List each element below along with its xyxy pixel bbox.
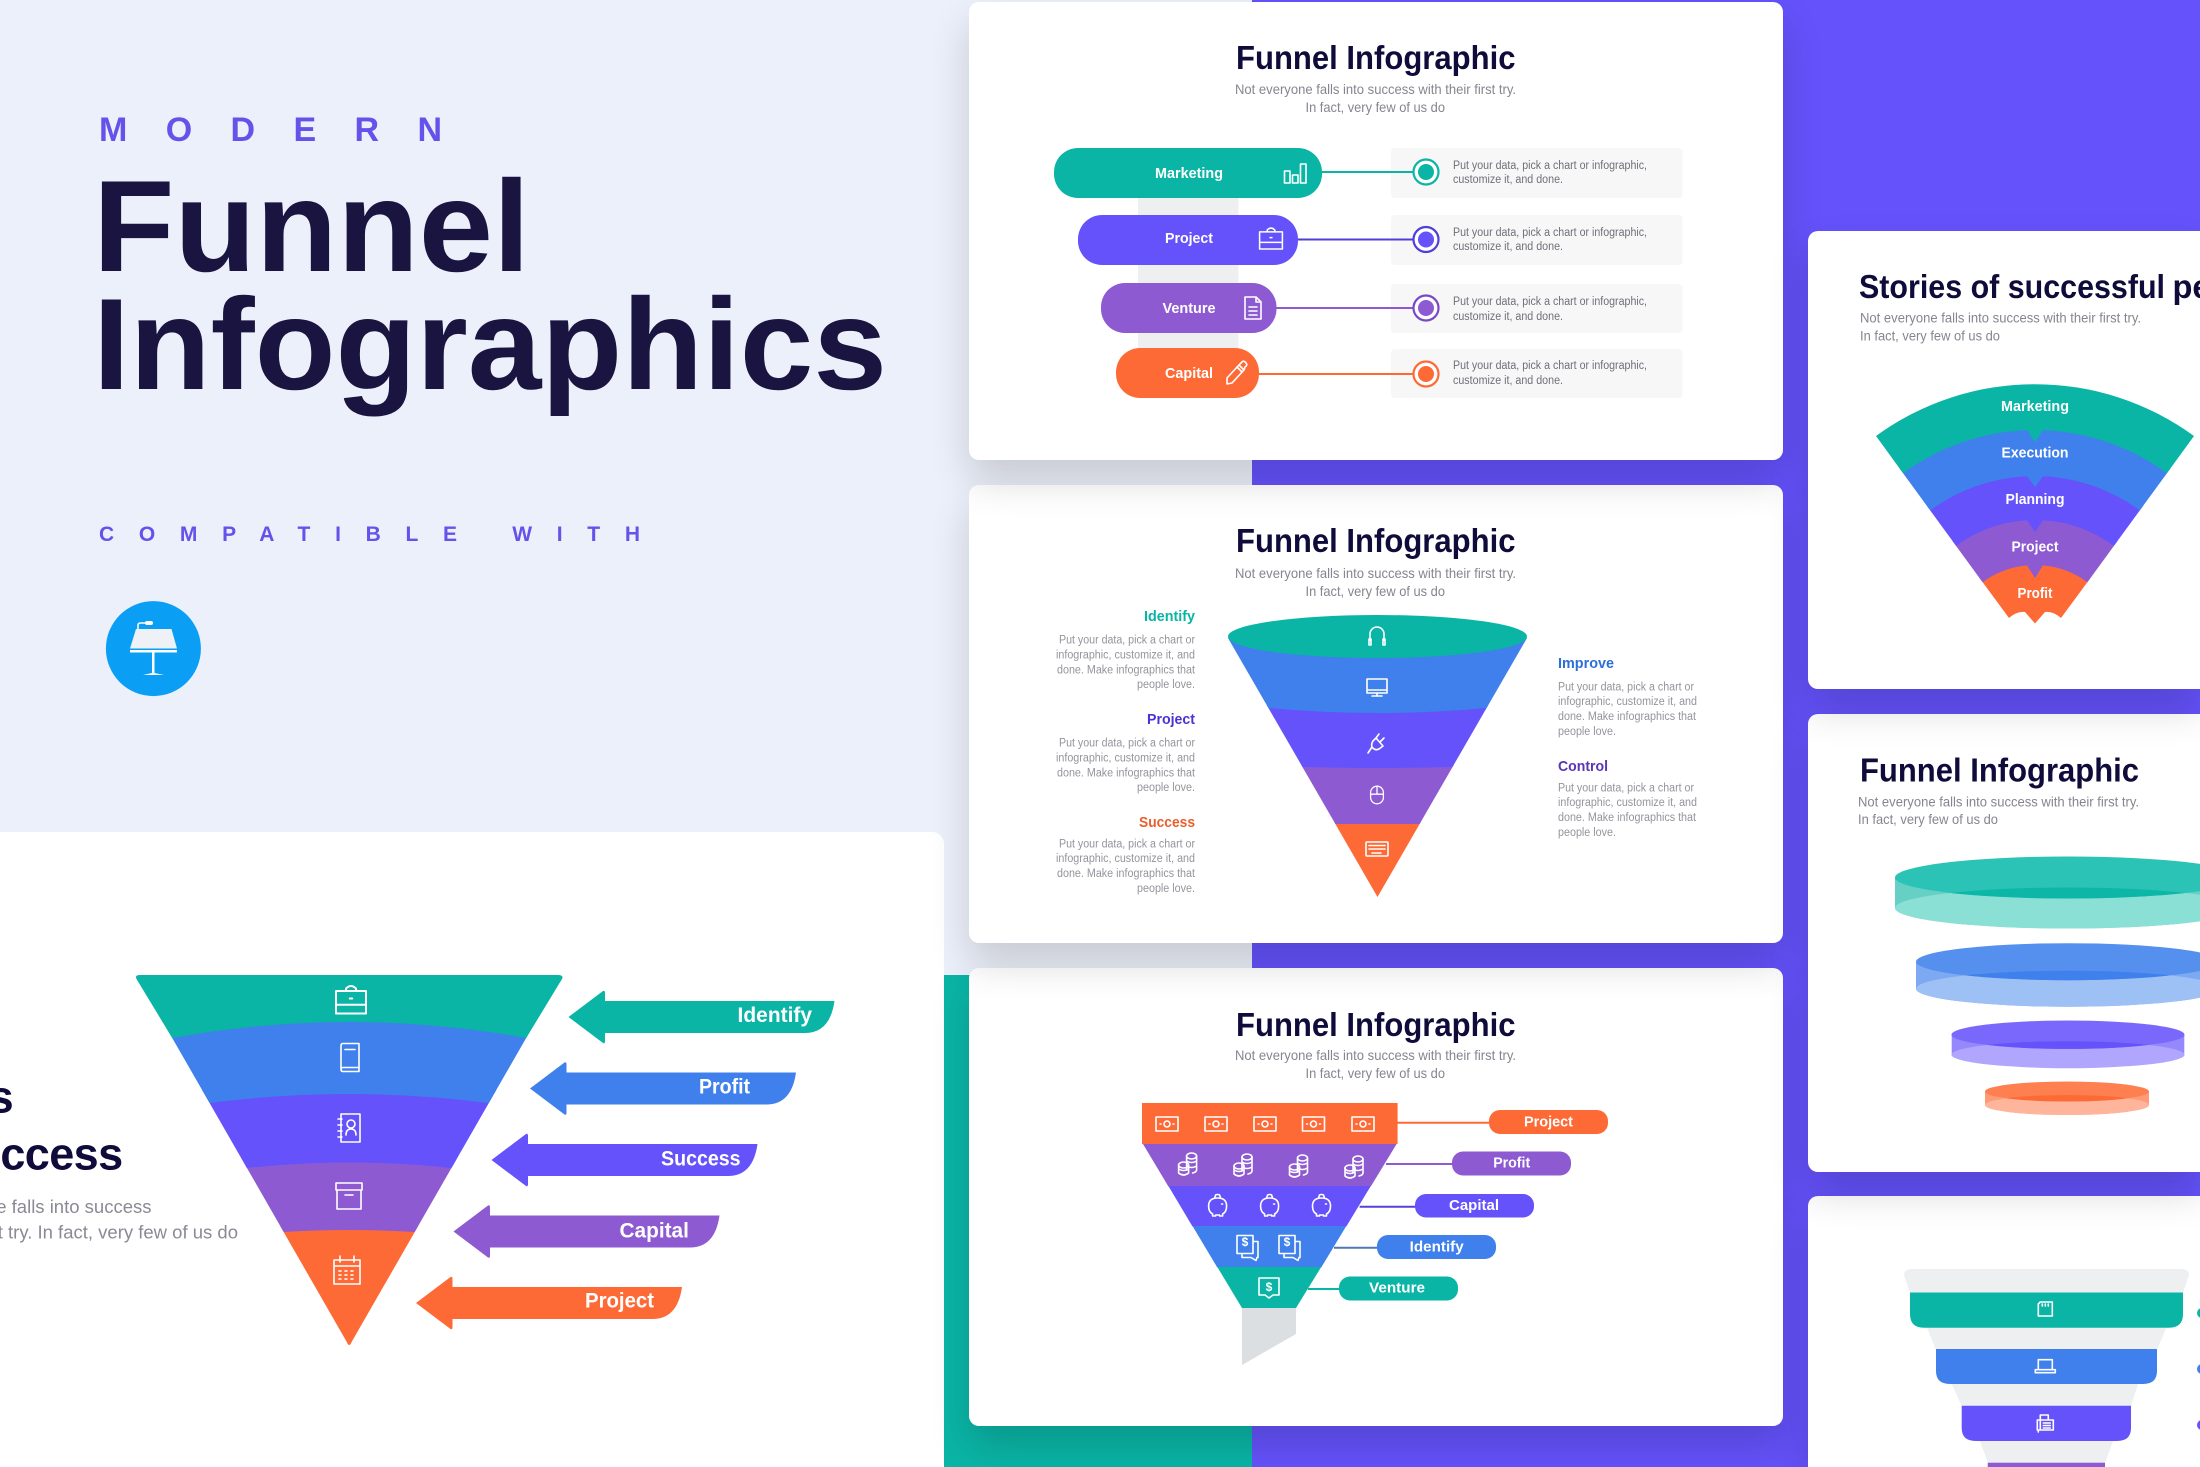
text block: Identify — [1056, 608, 1196, 691]
text block: Improve: Improve — [1558, 655, 1614, 672]
label: Capital — [1360, 1194, 1534, 1218]
icon: monitor — [1367, 679, 1387, 696]
subheading: In fact, very few of us do — [1306, 583, 1445, 599]
icon: keynote — [106, 601, 201, 696]
body copy: customize it, and done. — [1453, 241, 1563, 253]
text block: Improve: people love. — [1558, 726, 1616, 738]
arrow: Profit: Profit — [699, 1076, 750, 1098]
text block: Success — [1056, 814, 1196, 895]
bar: blue — [1936, 1349, 2157, 1384]
text block: Identify: people love. — [1137, 679, 1195, 691]
fan labels: Planning — [2006, 491, 2064, 508]
eyebrow: MODERN: MODERN — [99, 111, 442, 149]
label: Capital: Capital — [1449, 1198, 1499, 1214]
text block: Success: Success — [1139, 814, 1195, 831]
body copy: customize it, and done. — [1453, 174, 1563, 186]
panel: pill funnel card — [969, 2, 1783, 460]
subheading fragment — [0, 1196, 238, 1242]
label: Profit — [1386, 1152, 1571, 1176]
main title: Infographics — [93, 271, 887, 417]
text block: Improve — [1558, 655, 1697, 738]
heading: Funnel Infographic — [1236, 1006, 1516, 1043]
icon: headphones — [1369, 627, 1385, 645]
label: Venture: Venture — [1369, 1280, 1425, 1296]
label: Venture — [1308, 1276, 1458, 1300]
heading: Funnel Infographic — [1236, 39, 1516, 76]
icon: laptop — [2035, 1360, 2055, 1373]
icon: contact book — [338, 1114, 360, 1142]
text block: Success: Put your data, pick a chart or — [1059, 838, 1195, 850]
icon: plug — [1368, 734, 1384, 753]
body copy: customize it, and done. — [1453, 375, 1563, 387]
main title — [93, 153, 887, 417]
icons: money chat: $ — [1242, 1235, 1249, 1249]
body copy: Put your data, pick a chart or infographic, — [1453, 360, 1647, 372]
cone funnel chart — [1228, 615, 1527, 897]
heading fragment — [0, 1072, 122, 1180]
text block: Control: done. Make infographics that — [1558, 812, 1697, 824]
text block: Improve: infographic, customize it, and — [1558, 696, 1697, 708]
arrow: Project: Project — [585, 1290, 654, 1312]
body copy: Put your data, pick a chart or infographic, — [1453, 296, 1647, 308]
panel: stacked bars funnel card — [1808, 1196, 2200, 1467]
subheading — [1235, 1047, 1516, 1081]
funnel spout — [1242, 1308, 1296, 1365]
icons: coins — [1179, 1153, 1363, 1178]
subheading: Not everyone falls into success with their first try. — [1235, 81, 1516, 97]
funnel backing — [1904, 1269, 2189, 1463]
icons: banknotes — [1156, 1117, 1374, 1131]
fan funnel chart — [1876, 384, 2194, 624]
subheading: Not everyone falls into success with their first try. — [1235, 1047, 1516, 1063]
subheading: Not everyone falls into success with their first try. — [1858, 794, 2139, 810]
panel: fan funnel card — [1808, 231, 2200, 689]
connector: Capital — [1259, 362, 1438, 386]
text block: Control: Put your data, pick a chart or — [1558, 782, 1694, 794]
icons: money chat: $ — [1284, 1235, 1291, 1249]
icon: mouse — [1371, 786, 1383, 804]
icon: archive box — [336, 1183, 362, 1209]
text block: Project: Project — [1147, 711, 1195, 728]
text block: Project — [1056, 711, 1196, 794]
icon: dollar tag: $ — [1266, 1280, 1273, 1294]
funnel spine — [1138, 190, 1238, 355]
text block: Success: infographic, customize it, and — [1056, 853, 1195, 865]
fan labels: Marketing — [2001, 398, 2069, 415]
icon: briefcase — [336, 986, 366, 1014]
arrow: Project — [416, 1277, 682, 1329]
label: Profit: Profit — [1493, 1156, 1530, 1172]
body copy — [1453, 160, 1647, 387]
text block: Control: people love. — [1558, 827, 1616, 839]
heading: Funnel Infographic — [1236, 522, 1516, 559]
text block: Project: done. Make infographics that — [1057, 768, 1196, 780]
text block: Project: people love. — [1137, 782, 1195, 794]
panel: money funnel card — [969, 968, 1783, 1426]
disc: orange — [1985, 1082, 2149, 1115]
text block: Control: Control — [1558, 758, 1608, 775]
background: purple area — [1252, 0, 2200, 1467]
label: Identify: Identify — [1410, 1240, 1464, 1256]
text block: Identify: Identify — [1144, 608, 1196, 625]
pill: Capital: Capital — [1165, 365, 1213, 382]
icon: book — [341, 1044, 359, 1072]
connector: Venture — [1276, 296, 1438, 320]
arrow: Success — [492, 1134, 758, 1186]
panel: left arrow funnel card — [0, 832, 944, 1467]
panel: disc funnel card — [1808, 714, 2200, 1172]
icons: money chat — [1237, 1235, 1300, 1260]
arrow: Identify — [568, 991, 834, 1043]
text boxes — [1391, 148, 1682, 398]
subheading — [1858, 794, 2139, 827]
text block: Control: infographic, customize it, and — [1558, 797, 1697, 809]
arrow: Profit — [530, 1062, 796, 1115]
icon: calendar — [334, 1256, 360, 1284]
text block: Control — [1558, 758, 1697, 839]
stepped funnel chart — [1142, 1103, 1398, 1308]
pill: Marketing — [1054, 148, 1322, 198]
inverted funnel chart — [136, 975, 562, 1345]
text block: Identify: infographic, customize it, and — [1056, 650, 1195, 662]
text block: Project: Put your data, pick a chart or — [1059, 738, 1195, 750]
icon: dollar tag — [1259, 1278, 1279, 1298]
subheading — [1235, 81, 1516, 115]
pill: Project — [1078, 215, 1298, 265]
disc: indigo — [1952, 1020, 2184, 1068]
body copy: customize it, and done. — [1453, 311, 1563, 323]
connector: Marketing — [1322, 160, 1438, 184]
main title: Funnel — [93, 153, 530, 299]
subheading: In fact, very few of us do — [1858, 811, 1998, 827]
icons: piggy banks — [1209, 1194, 1330, 1216]
arrow: Success: Success — [661, 1148, 741, 1170]
pill: Marketing: Marketing — [1155, 165, 1223, 182]
pill: Venture: Venture — [1162, 300, 1216, 317]
fan labels: Profit — [2018, 585, 2052, 602]
subheading: Not everyone falls into success with their first try. — [1860, 310, 2141, 326]
text block: Success: done. Make infographics that — [1057, 868, 1196, 880]
text block: Project: infographic, customize it, and — [1056, 752, 1195, 764]
icon: fax — [2037, 1415, 2053, 1432]
label: Project — [1397, 1110, 1608, 1134]
text block: Identify: done. Make infographics that — [1057, 664, 1196, 676]
icon: memory card — [2038, 1302, 2052, 1316]
background: teal area — [944, 975, 1252, 1467]
fan labels: Project — [2012, 539, 2058, 556]
subheading: In fact, very few of us do — [1860, 328, 2000, 344]
text block: Success: people love. — [1137, 883, 1195, 895]
heading: Stories of successful — [1859, 268, 2165, 305]
subheading: In fact, very few of us do — [1306, 1065, 1445, 1081]
label: Identify — [1334, 1235, 1496, 1259]
pill: Project: Project — [1165, 230, 1213, 247]
bar: indigo — [1962, 1406, 2131, 1441]
disc: blue — [1916, 943, 2200, 1007]
disc: teal — [1895, 856, 2200, 928]
subheading: Not everyone falls into success with their first try. — [1235, 565, 1516, 581]
arrow: Capital: Capital — [619, 1220, 689, 1242]
bar: purple — [1988, 1463, 2105, 1467]
legend dots — [2197, 1308, 2200, 1430]
subheading — [1860, 310, 2141, 344]
subheading — [1235, 565, 1516, 599]
fan labels — [2001, 398, 2069, 602]
subheading: In fact, very few of us do — [1306, 99, 1445, 115]
text block: Identify: Put your data, pick a chart or — [1059, 635, 1195, 647]
pill: Capital — [1116, 348, 1259, 398]
compatible with label: COMPATIBLE WITH — [99, 523, 640, 546]
pill: Venture — [1101, 283, 1276, 333]
text block: Improve: done. Make infographics that — [1558, 711, 1697, 723]
arrow: Identify: Identify — [738, 1004, 812, 1027]
text block: Improve: Put your data, pick a chart or — [1558, 682, 1694, 694]
heading: Funnel Infographic — [1860, 752, 2139, 789]
label: Project: Project — [1524, 1114, 1573, 1130]
fan labels: Execution — [2002, 445, 2068, 462]
bar: teal — [1910, 1292, 2183, 1328]
panel: cone funnel card — [969, 485, 1783, 943]
icon: keyboard — [1366, 842, 1388, 856]
body copy: Put your data, pick a chart or infographic, — [1453, 160, 1647, 172]
arrow: Capital — [454, 1205, 720, 1258]
body copy: Put your data, pick a chart or infographic, — [1453, 227, 1647, 239]
connector: Project — [1298, 227, 1438, 252]
hero text panel — [93, 111, 887, 696]
